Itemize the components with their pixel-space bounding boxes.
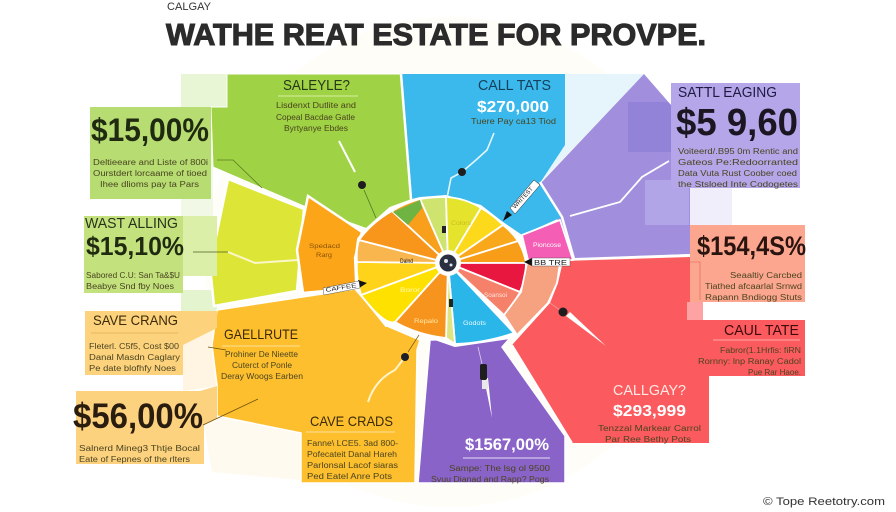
tag: pink wedge	[524, 258, 570, 267]
tag: pink wedge: BB TRE	[534, 260, 567, 267]
wedge: bottom segments	[395, 263, 514, 344]
panel: gold sector	[212, 289, 420, 483]
leader: salmon callout	[638, 262, 700, 300]
value: $5 9,60	[676, 102, 798, 144]
value: $154,4S%	[697, 231, 806, 261]
description: Voiteerd/.B95 0m Rentic and	[678, 147, 798, 156]
description: Deltieeare and Liste of 800i	[93, 158, 208, 167]
description	[307, 439, 398, 481]
description: Tiathed afcaarlal Srnwd	[705, 282, 802, 291]
box: purple value callout	[671, 83, 800, 189]
panel: orange sector	[297, 196, 362, 293]
heading: CALLGAY?	[613, 382, 686, 399]
eyebrow: CALGAY	[167, 1, 212, 13]
description: Sabored C.U: San Ta&$U	[86, 271, 180, 280]
wedge: left segments	[357, 199, 448, 322]
wedge labels: Godots	[463, 321, 486, 327]
heading: CAVE CRADS	[310, 413, 393, 429]
heading: SAVE CRANG	[93, 312, 178, 328]
pin: small bottom	[449, 299, 453, 307]
title block	[166, 1, 706, 52]
description: the Stsloed Inte Codogetes	[678, 180, 798, 189]
wedge labels: Boror	[400, 288, 420, 294]
description: Parlonsal Lacof siaras	[307, 461, 398, 470]
value: $1567,00%	[465, 435, 549, 454]
panel: green sector	[211, 74, 411, 232]
wedge labels: Pioncose	[533, 243, 562, 249]
pin: small top	[442, 226, 446, 233]
tag: left wedge: CAFFEE	[325, 283, 357, 294]
heading: WAST ALLING	[85, 215, 178, 232]
wedge labels: Repalo	[414, 319, 439, 325]
description: Deray Woogs Earben	[221, 372, 303, 381]
tag: blue wedge	[503, 180, 540, 221]
leader lines and pins	[193, 133, 700, 425]
description: Data Vuta Rust Coober coed	[678, 169, 797, 178]
white leader line	[570, 161, 669, 216]
leader: large gold value	[203, 399, 258, 425]
heading: CALL TATS	[478, 77, 551, 94]
wedge labels	[400, 221, 562, 327]
leader: lime callout	[193, 251, 228, 253]
value: $15,00%	[91, 112, 209, 148]
hub icon	[435, 250, 461, 276]
heading: SATTL EAGING	[678, 84, 777, 101]
description: Fabror(1.1Hrfis: fiRN	[720, 346, 801, 355]
description: Par Ree Bethy Pots	[605, 435, 691, 444]
box: lime value callout	[84, 215, 217, 293]
description: Seaaltiy Carcbed	[730, 271, 802, 280]
wedge: top segments	[420, 197, 526, 263]
panel: lime sector	[210, 179, 304, 306]
description: Rornny: lnp Ranay Cadol	[698, 357, 801, 366]
panel: red sector	[512, 255, 805, 444]
description: Pofecateit Danal Hareh	[307, 450, 397, 459]
box: salmon value callout	[687, 225, 806, 320]
description	[86, 271, 180, 291]
leader: green callout	[217, 160, 262, 188]
description: Pue Rar Haoe.	[748, 368, 801, 377]
heading: GAELLRUTE	[224, 326, 298, 342]
panel: purple bottom sector	[418, 338, 565, 484]
description: Svuu Dianad and Rapp? Pogs	[431, 475, 549, 484]
description	[705, 271, 802, 302]
description: Ped Eatel Anre Pots	[307, 472, 392, 481]
description: Byrtyanye Ebdes	[284, 124, 348, 133]
description: Tenzzal Markear Carrol	[598, 424, 701, 433]
description: Fanne\ LCE5. 3ad 800-	[307, 439, 398, 448]
description: Salnerd Mineg3 Thtje Bocal	[79, 444, 200, 453]
value: $270,000	[477, 99, 549, 116]
description	[276, 101, 356, 133]
box: save crang callout	[85, 311, 217, 375]
value: $293,999	[613, 403, 686, 420]
box: large gold value callout	[73, 386, 217, 464]
description	[93, 158, 208, 189]
description	[598, 424, 701, 444]
pin: gold	[368, 335, 419, 402]
pin: green	[339, 141, 376, 218]
faint background tints	[181, 17, 732, 507]
description: Danal Masdn Caglary	[89, 353, 180, 362]
copyright: © Tope Reetotry.com	[763, 496, 885, 508]
box: green value callout	[90, 107, 211, 199]
wedge: right segments	[448, 263, 560, 335]
description: Ourstdert lorcaame of tioed	[93, 169, 207, 178]
sector label	[309, 244, 340, 259]
pin: blue	[447, 133, 494, 198]
description	[221, 350, 303, 381]
sector label: Spedacd	[309, 244, 340, 250]
leader: save crang	[208, 347, 226, 350]
value: $56,00%	[73, 397, 203, 436]
description: Pe date blofhfy Noes	[89, 364, 176, 373]
value: $15,10%	[86, 231, 184, 261]
wedge: pink	[522, 220, 573, 260]
description: Lisdenxt Dutlite and	[276, 101, 356, 110]
tag: left wedge	[323, 280, 367, 295]
main heading: WATHE REAT ESTATE FOR PROVPE.	[166, 17, 706, 52]
description	[431, 464, 551, 484]
wedge labels: Dalnd	[400, 259, 413, 265]
description	[698, 346, 801, 377]
panel: blue sector	[401, 74, 574, 259]
description: Fleterl. C5f5, Cost $00	[89, 342, 180, 351]
wedge labels: Soansoi	[484, 293, 507, 299]
description	[89, 342, 180, 373]
heading: CAUL TATE	[724, 322, 799, 339]
description: Gateos Pe:Redoorranted	[678, 158, 798, 167]
description: Tuere Pay ca13 Tiod	[471, 117, 556, 126]
description	[678, 147, 798, 189]
icon: green patch	[393, 200, 422, 225]
description: Sampe: The lsg ol 9500	[449, 464, 551, 473]
description	[79, 444, 200, 464]
heading: SALEYLE?	[283, 77, 350, 94]
pin: red	[550, 303, 606, 346]
description: Prohiner De Nieette	[225, 350, 299, 359]
description: Beabye Snd fby Noes	[86, 282, 174, 291]
description: Eate of Fepnes of the rlters	[79, 455, 190, 464]
central wheel	[355, 74, 574, 346]
pin: purple bottom	[478, 347, 492, 418]
panel: purple right sector	[541, 74, 690, 259]
description: Rapann Bndiogg Stuts	[705, 293, 802, 302]
description: Copeal Bacdae Gatle	[276, 113, 356, 122]
wedge labels: Colors	[451, 221, 471, 227]
description: Cuterct of Ponle	[232, 361, 293, 370]
sector label: Rarg	[316, 253, 332, 259]
description: Ihee dlioms pay ta Pars	[100, 180, 199, 189]
tag: blue wedge: WRITEST	[512, 186, 535, 210]
